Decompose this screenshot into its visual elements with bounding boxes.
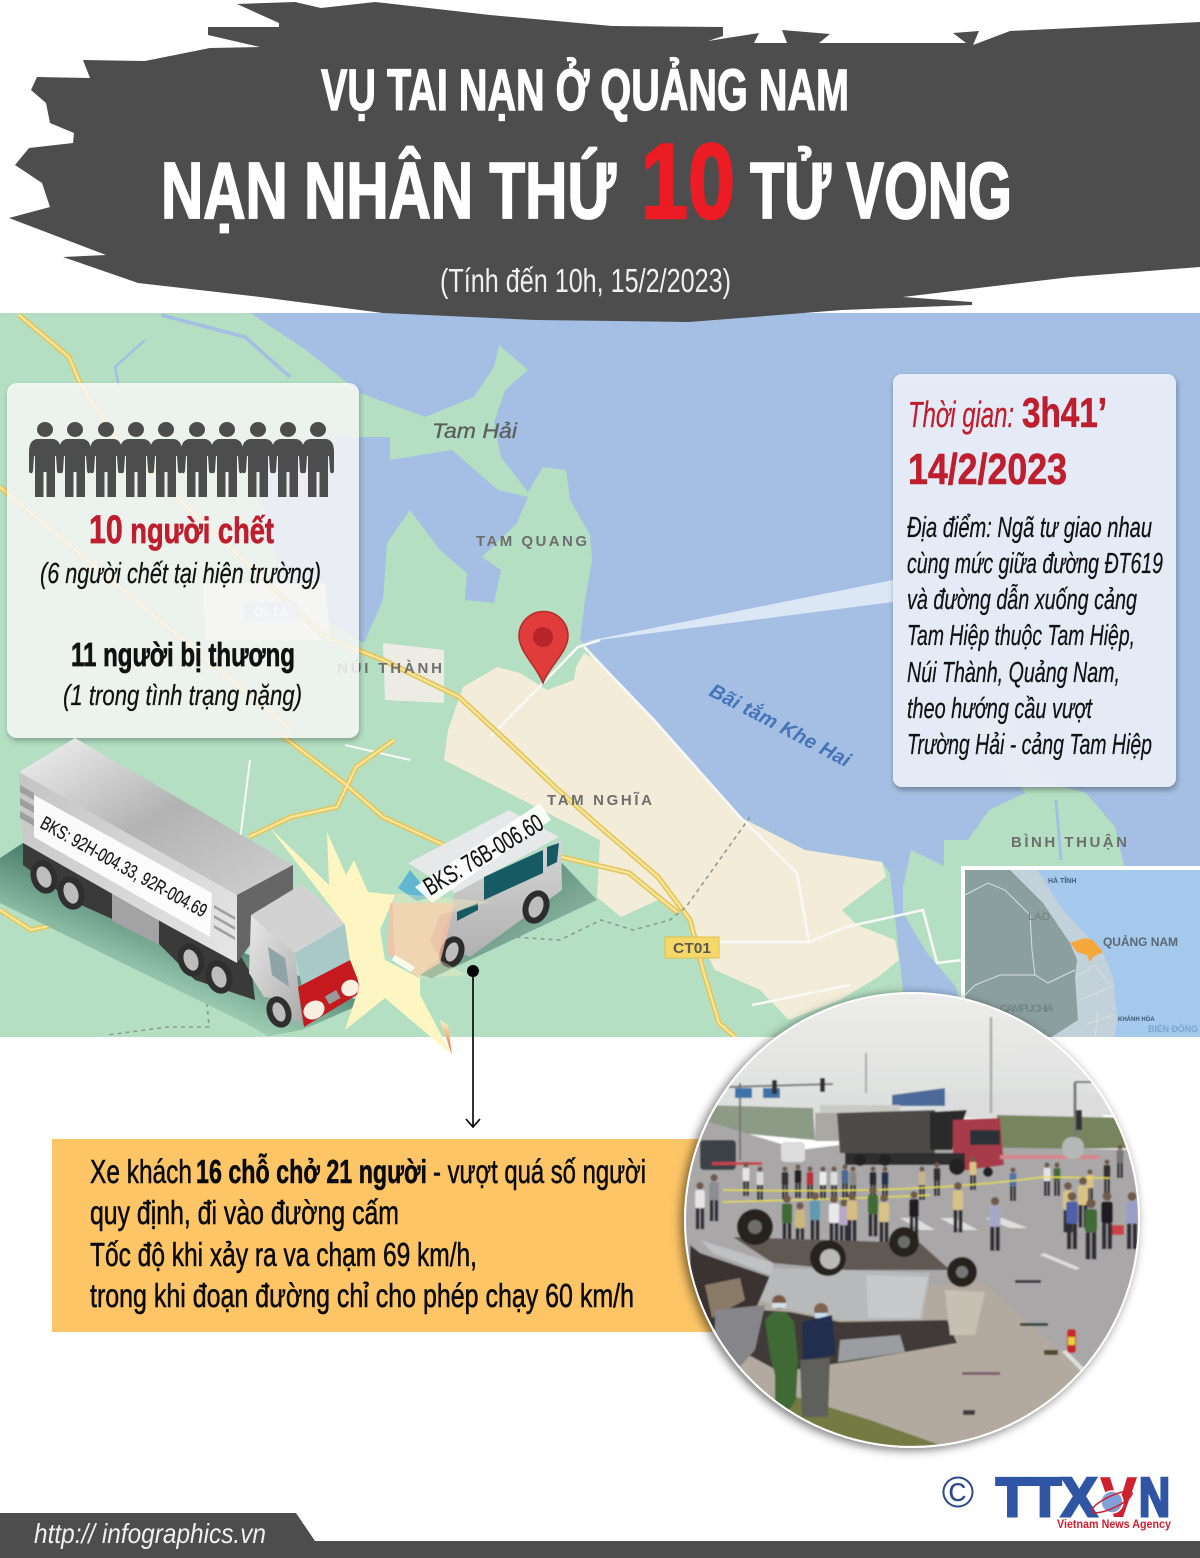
note box: violation details: Xe khách <box>90 1153 192 1190</box>
globe <box>1101 1491 1123 1513</box>
map label: CT01: CT01 <box>673 940 711 957</box>
van interior <box>689 1244 770 1332</box>
time value: 3h41’ <box>1022 389 1107 436</box>
van roof <box>408 810 559 893</box>
truck wheels <box>30 860 233 994</box>
photo overturned van <box>690 1209 985 1372</box>
map label: Tam Quang: TAM QUANG <box>476 533 587 550</box>
photo fire extinguisher and debris <box>962 1280 1076 1415</box>
trailer side <box>19 772 237 963</box>
title line 1: VỤ TAI NẠN Ở QUẢNG NAM <box>321 58 849 123</box>
illustration: collision burst <box>270 828 452 1055</box>
copyright mark: © <box>942 1468 974 1517</box>
map: urban areas <box>203 583 444 703</box>
truck cab roof <box>251 884 346 953</box>
truck windshield <box>295 923 354 987</box>
map: dotted boundary <box>107 817 750 1035</box>
truck chassis <box>23 843 255 1000</box>
map: lagoon <box>359 437 528 643</box>
van wheels <box>737 1209 773 1245</box>
inset map: Quang Nam location: KHÁNH HÒA <box>1118 1015 1155 1023</box>
injured count: 11 người bị thương <box>71 636 295 673</box>
map label: Tam Hai: Tam Hải <box>432 420 518 443</box>
number 10 highlight: 10 <box>641 121 735 241</box>
note box: violation details <box>52 1139 712 1332</box>
photo trees <box>700 1105 815 1140</box>
location text: theo hướng cầu vượt <box>907 693 1093 725</box>
photo foreground man in navy <box>800 1303 836 1417</box>
icon: ten people <box>29 422 334 497</box>
truck plate label <box>34 795 212 937</box>
photo road markings <box>900 1218 1086 1372</box>
truck side window <box>268 947 289 987</box>
van windshield <box>398 870 432 901</box>
note box: violation details: quy định, đi vào đường cấm <box>90 1194 399 1231</box>
van undercarriage <box>733 1237 950 1270</box>
photo officers and crowd near <box>695 1174 1138 1259</box>
van side body <box>440 840 562 957</box>
wordmark: TTX <box>996 1466 1097 1528</box>
truck red front <box>298 958 362 1027</box>
map label: Bai tam Khe Hai: Bãi tắm Khe Hai <box>706 679 855 772</box>
photo parked cars <box>781 1142 805 1162</box>
logo: TTXVN <box>942 1466 1171 1531</box>
map: yellow highways <box>0 315 735 1037</box>
time label: Thời gian: <box>908 394 1014 435</box>
photo foreground police officer <box>765 1295 798 1412</box>
burst glare over van <box>392 893 490 978</box>
location text <box>907 512 1163 761</box>
map: rivers <box>115 315 1061 860</box>
van wheels <box>439 890 550 967</box>
van plate label <box>415 803 551 903</box>
note box: violation details: trong khi đoạn đường chỉ cho phép chạy 60 km/h <box>90 1277 634 1314</box>
trailer front <box>237 865 293 963</box>
map: mainland <box>0 313 905 1037</box>
photo: accident scene <box>680 985 1150 1450</box>
map <box>0 313 1200 1037</box>
van silver body <box>760 1268 930 1320</box>
inset map: Quang Nam location <box>961 866 1200 1038</box>
inset map: Quang Nam location: LÀO <box>1028 910 1050 923</box>
panel: time and location <box>893 374 1176 787</box>
note box: violation details: - vượt quá số người <box>433 1153 646 1190</box>
date: 14/2/2023 <box>908 445 1067 494</box>
photo bystanders far <box>743 1144 1123 1203</box>
agency name: Vietnam News Agency <box>1057 1517 1171 1531</box>
van front under burst glare <box>387 903 455 977</box>
pointer arrow from van to note <box>466 965 480 1127</box>
map label: QL1A: QL1A <box>254 604 289 619</box>
photo caution tape <box>722 1177 1110 1202</box>
note box: violation details: Tốc độ khi xảy ra va chạm 69 km/h, <box>90 1236 477 1273</box>
truck plate label: BKS: 92H-004.33, 92R-004.69 <box>37 813 210 922</box>
map label: QL1A <box>284 602 298 615</box>
photo buildings <box>963 1114 1104 1120</box>
callout wedge from pin to location panel <box>583 580 893 642</box>
header brush background <box>9 2 1200 322</box>
trailer top <box>19 738 293 895</box>
title line 2 <box>161 121 1012 241</box>
van roof frame <box>700 1240 775 1277</box>
footer band <box>0 1513 1200 1558</box>
icon: location pin <box>519 612 568 683</box>
title line 2: TỬ VONG <box>750 146 1012 235</box>
photo curb stripes <box>712 1155 1124 1235</box>
photo sky <box>718 994 1112 1116</box>
note box: violation details: 16 chỗ chở 21 người <box>196 1153 427 1190</box>
map: sea <box>250 313 1200 997</box>
photo poles and gantry <box>727 1017 1092 1160</box>
photo grass <box>790 1395 940 1450</box>
truck cab side <box>249 915 302 1025</box>
photo truck <box>837 1110 1004 1177</box>
map: white roads <box>240 640 962 1005</box>
van plate label: BKS: 76B-006.60 <box>419 809 548 901</box>
map label: Tam Nghia: TAM NGHĨA <box>547 791 652 809</box>
inset map: Quang Nam location: QUẢNG NAM <box>1103 934 1178 949</box>
deaths note: (6 người chết tại hiện trường) <box>40 558 321 590</box>
subtitle date: (Tính đến 10h, 15/2/2023) <box>440 262 731 299</box>
inset map: Quang Nam location: BIỂN ĐÔNG <box>1148 1023 1198 1034</box>
injured note: (1 trong tình trạng nặng) <box>63 680 302 712</box>
map: sand area <box>444 653 899 1020</box>
van shadow <box>420 863 597 978</box>
panel: casualties <box>7 383 359 738</box>
map: eastern land <box>903 787 1124 998</box>
logo: TTXVN: V <box>1101 1466 1136 1528</box>
map label: Binh Thuan: BÌNH THUẬN <box>1011 833 1127 851</box>
photo road shoulder <box>740 1284 1080 1444</box>
title line 2: NẠN NHÂN THỨ <box>161 146 616 235</box>
logo: TTXVN: N <box>1139 1466 1170 1528</box>
trailer stripes <box>20 785 235 940</box>
van windows <box>457 843 559 921</box>
map label: Nui Thanh: NÚI THÀNH <box>337 659 442 677</box>
deaths count: 10 người chết <box>89 508 274 552</box>
van debris <box>730 1310 957 1372</box>
website url: http:// infographics.vn <box>34 1518 266 1549</box>
map label: CT01 <box>665 937 719 958</box>
truck shadow <box>0 843 364 1036</box>
illustration: van <box>387 803 597 978</box>
photo road <box>686 1122 1138 1371</box>
inset map: Quang Nam location: CAMPUCHIA <box>1000 1003 1054 1015</box>
illustration: truck <box>0 738 364 1036</box>
inset map: Quang Nam location: HÀ TĨNH <box>1048 876 1076 885</box>
